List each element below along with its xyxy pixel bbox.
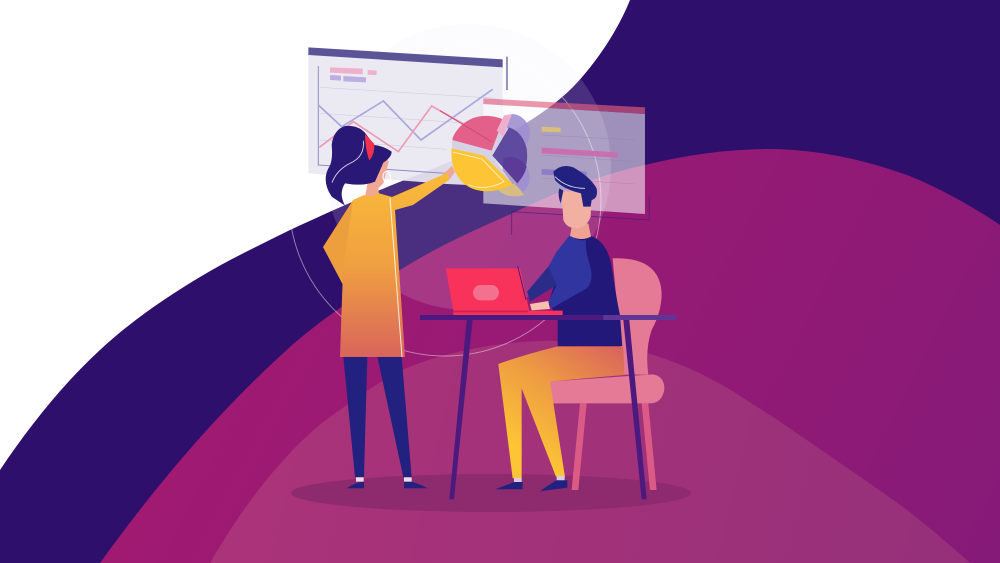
man: torso [548,235,622,346]
pie: pink sliver [497,114,512,137]
man: face [562,192,592,228]
table: top [420,315,603,320]
laptop: logo [473,285,499,300]
woman: hair [326,126,392,206]
woman: headband [365,134,374,161]
pie: slice outline [453,152,504,187]
pie: tan slice [498,183,524,196]
woman: legs [343,357,428,488]
woman: hair highlight [332,141,363,183]
woman: far arm [323,200,353,285]
laptop: screen [446,268,529,311]
man: neck [570,223,591,239]
man: trousers and shoes [495,347,624,491]
table board, translucent [483,98,649,235]
background: magenta wave [100,149,1000,563]
translucent spotlight circle [325,24,611,310]
woman: hand [443,166,455,180]
pie: yellow slice [451,148,513,191]
woman: dress [340,173,449,357]
woman [323,157,455,488]
man: upper body and head [527,166,622,346]
desk [420,266,676,499]
table: legs [449,320,647,499]
pie: red slice [452,116,503,151]
chair [548,258,664,490]
man: forearm [527,267,557,302]
woman: dress highlight [390,198,402,357]
thin outline circle [289,44,601,356]
pie: pale hub between slices [452,119,513,184]
pie: lilac lobes [503,114,530,192]
woman: earring [383,171,390,182]
laptop: base [453,311,563,315]
man: upper arm [527,235,592,308]
man: hair [553,166,597,207]
background: lower hill [210,341,970,563]
pie: purple slice [492,127,527,183]
pie chart [440,111,530,196]
woman head [326,126,392,206]
woman: head skin and neck [365,157,389,197]
man [495,166,624,491]
line chart board [308,47,507,187]
floor shadow [291,474,691,512]
man: hand [530,301,550,310]
